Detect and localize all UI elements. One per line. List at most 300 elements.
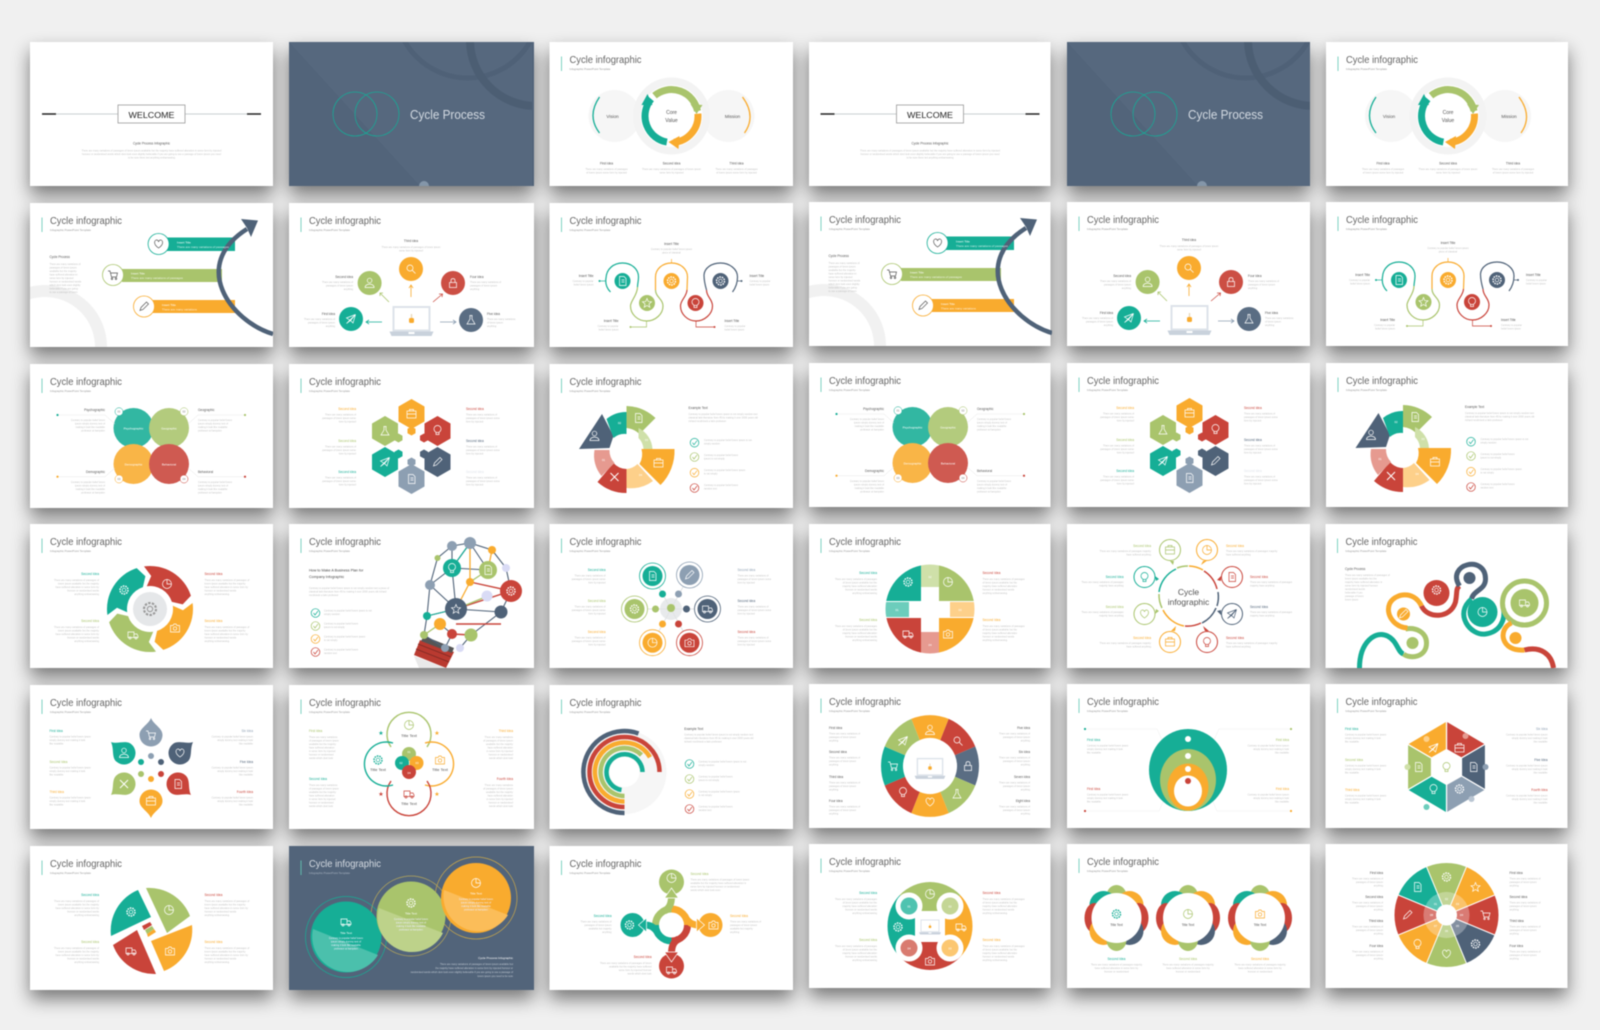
slide: hexagon cycle copy: form by injected xyxy=(1117,420,1135,422)
slide: four arrow ring xyxy=(30,524,273,668)
slide: laptop ideas: Second idea xyxy=(335,275,353,279)
slide: hexagon sectors: First Idea xyxy=(1345,727,1359,731)
slide: winding path: Contrary to popular xyxy=(598,325,619,328)
slide: four arrow ring: Second Idea xyxy=(204,572,223,576)
slide: four overlapping circles: Psychographic xyxy=(124,426,144,430)
slide: winding path: belief lorem ipsum xyxy=(599,328,618,332)
slide: six ringed nodes: form by injected xyxy=(738,612,755,616)
slide: callout ring: There are many variations of passages majority xyxy=(1226,550,1278,553)
slide: callout ring: majority have anything xyxy=(1250,584,1275,588)
slide: four arrow ring: Second Idea xyxy=(81,619,99,623)
slide: cross wheel: Cycle infographic xyxy=(829,537,901,548)
slide: arrow bars: passages of lorem ipsum xyxy=(50,266,77,270)
slide: segmented wheel with checklist: classical latin literature from 45 bc making it over 2000 years old xyxy=(688,416,758,420)
slide: callout ring: Second Idea xyxy=(1226,636,1244,640)
slide: segmented wheel with checklist: is not simply xyxy=(704,472,718,476)
slide: four overlapping circles copy: Psychographic xyxy=(863,407,884,411)
slide: four lobe clover: words which dont look xyxy=(489,757,514,760)
slide: eight segment wheel: 06 xyxy=(1445,929,1448,933)
slide: callout ring: Cycle xyxy=(1178,587,1199,597)
slide: pinwheel pie: Cycle infographic xyxy=(50,859,122,870)
slide: eight segment wheel: 05 xyxy=(1456,924,1459,928)
slide: four arrows cross: some form by injected humour or randomised xyxy=(690,886,740,888)
slide: arrow bars copy: Insert Title xyxy=(941,302,955,306)
slide: four quadrant disc with laptop: There are many variations of passages xyxy=(835,898,878,901)
slide: segmented wheel with checklist: Example Text xyxy=(688,406,708,410)
slide: cross wheel: There are many variations of passages xyxy=(982,625,1025,628)
slide: eight segment ring with laptop: anything xyxy=(829,812,839,816)
slide: four arrow ring: anything embarrassing xyxy=(204,593,230,596)
slide: three petal rings xyxy=(1067,844,1310,988)
slide: winding path copy: Contrary to popular xyxy=(1349,279,1370,282)
slide: four quadrant disc with laptop: There are many variations of passages xyxy=(982,945,1025,948)
slide: cross wheel: Second Idea xyxy=(859,618,877,622)
slide: rainbow arcs with checklist: ipsum is not simply xyxy=(698,779,720,782)
slide: welcome copy: Cycle Process Infographic xyxy=(911,142,949,146)
slide: hexagon cycle: Second idea xyxy=(338,439,356,443)
slide: pinwheel pie: humour or randomised words xyxy=(67,910,100,914)
slide: segmented wheel with checklist copy: richard mcclintock a latin professor xyxy=(1465,419,1503,422)
slide: four overlapping circles: making it look like readable xyxy=(76,488,106,491)
slide: welcome: to be sure there isnt anything embarrassing xyxy=(128,156,176,160)
slide: eight segment ring with laptop: passages of lorem ipsum xyxy=(1003,736,1030,739)
slide: four lobe clover: There are many variations xyxy=(309,784,338,787)
slide: three circles on navy: lorem ipsum you need to be sure xyxy=(478,975,514,978)
slide: three circles on navy: making it look like readable xyxy=(331,944,361,947)
slide: four overlapping circles copy: 04 xyxy=(962,476,965,480)
slide: rainbow arcs with checklist: Cycle infographic xyxy=(570,698,642,709)
slide: arrow bars: There are many variations xyxy=(162,308,197,312)
slide: cross wheel: Second Idea xyxy=(982,618,1001,622)
slide: six ringed nodes: passages of lorem ipsum some xyxy=(572,640,606,643)
slide: hexagon sectors: Cycle infographic xyxy=(1346,697,1418,708)
slide: three circles on navy: professor at hampden xyxy=(464,908,488,912)
slide: nested circles: Contrary to popular belief lorem ipsum xyxy=(1087,744,1128,748)
slide: four quadrant disc with laptop: majority have suffered alteration xyxy=(842,905,878,908)
slide: teardrop flower: simply dummy text making it look xyxy=(217,770,254,773)
slide: four lobe clover: have suffered alteration xyxy=(488,746,514,750)
slide: core value cycle: some form by injected xyxy=(660,172,684,174)
slide: hexagon sectors: simply dummy text making it look xyxy=(1345,768,1382,771)
slide: three circles on navy: professor at hampden xyxy=(334,948,358,950)
slide: teardrop flower: Cycle infographic xyxy=(50,698,122,709)
slide: nested circles: First Idea xyxy=(1087,738,1101,742)
slide: core value cycle copy: Second idea xyxy=(1439,162,1457,166)
slide: six ringed nodes: passages of lorem ipsum some xyxy=(572,578,606,581)
slide: pinwheel pie: anything embarrassing xyxy=(204,914,230,917)
slide: winding path: belief lorem ipsum xyxy=(574,284,594,286)
slide: segmented wheel with checklist: ipsum is not simply xyxy=(704,458,725,460)
slide: three circles on navy: the majority have suffered alteration in some form by injected humour or xyxy=(435,967,513,970)
slide: four arrow ring: There are many variations of passages of xyxy=(204,626,250,629)
slide: pinwheel pie: There are many variations of passages of xyxy=(204,900,250,903)
slide: eight segment ring with laptop: Eight idea xyxy=(1016,799,1030,803)
slide: eight segment wheel: anything xyxy=(1374,884,1384,888)
slide: arrow bars: to use a passage of lorem xyxy=(50,291,78,294)
slide: segmented wheel with checklist: Cycle infographic xyxy=(570,377,642,388)
slide: hexagon sectors: simply dummy text making it look xyxy=(1512,737,1548,740)
slide: six ringed nodes: There are many variations of xyxy=(738,636,769,640)
slide: four overlapping circles copy: ipsum simply dummy text of xyxy=(977,422,1007,424)
slide: core value cycle: of lorem ipsum some form by injected xyxy=(716,172,757,174)
slide: arrow bars: Insert Title xyxy=(162,303,176,307)
slide: hexagon sectors: Contrary to popular belief lorem ipsum xyxy=(1506,764,1548,768)
slide: winding path: belief lorem ipsum xyxy=(724,328,744,332)
slide: laptop ideas: passages of lorem ipsum xyxy=(470,284,497,288)
slide: four arrow ring: anything embarrassing xyxy=(74,593,100,596)
slide: winding path copy: belief lorem ipsum xyxy=(1501,328,1521,330)
slide: teardrop flower: Contrary to popular belief lorem ipsum xyxy=(212,766,253,770)
slide: nested circles: Infographic PowerPoint Template xyxy=(1087,709,1128,713)
slide: cross wheel: humour or randomised words xyxy=(982,588,1015,592)
slide: laptop ideas: Third idea xyxy=(404,239,418,243)
slide: segmented wheel with checklist copy: 01 xyxy=(1378,457,1382,461)
slide: four arrows cross: anything xyxy=(730,931,740,934)
slide: segmented wheel with checklist copy: simply random xyxy=(1480,442,1496,444)
slide: eight segment wheel: anything xyxy=(1510,932,1519,936)
slide: eight segment ring with laptop: Four idea xyxy=(829,799,843,803)
slide: three petal rings: Infographic PowerPoint Template xyxy=(1087,869,1128,873)
slide: three petal rings: have suffered alteration in some form by xyxy=(1166,967,1211,970)
slide: hexagon cycle copy: There are many variations of xyxy=(1103,476,1134,478)
slide: rainbow arcs with checklist: Contrary to popular belief lorem ipsum is not simply random text xyxy=(684,734,753,736)
slide: rainbow arcs with checklist: Infographic PowerPoint Template xyxy=(570,710,611,714)
slide: segmented wheel with checklist: simply random xyxy=(704,442,720,446)
slide: eight segment ring with laptop: There are many variations of xyxy=(829,782,860,784)
slide: teardrop flower: simply dummy text making it look xyxy=(50,739,86,742)
slide: eight segment wheel: anything xyxy=(1374,932,1384,936)
slide: arrow bars: have suffered alteration in xyxy=(50,274,78,276)
slide: four lobe clover: have suffered alteration xyxy=(309,794,335,798)
slide: hexagon sectors: Five Idea xyxy=(1534,758,1548,762)
slide: three circles on navy: professor at hampden xyxy=(399,928,423,932)
slide: pinwheel pie: There are many variations of passages of xyxy=(54,947,99,950)
slide: lightbulb network: Company Infographic xyxy=(309,575,344,579)
slide: welcome copy: WELCOME xyxy=(907,110,953,120)
slide: four lobe clover: available but the majority xyxy=(309,791,337,794)
slide: eight segment wheel: Second idea xyxy=(1365,895,1383,899)
slide: four quadrant disc with laptop: majority have suffered alteration xyxy=(982,952,1018,955)
slide: hexagon cycle: Second idea xyxy=(338,407,356,411)
slide: six ringed nodes: form by injected xyxy=(588,644,606,646)
slide: hexagon cycle copy: form by injected xyxy=(1244,482,1262,486)
slide: core value cycle: Value xyxy=(665,118,678,124)
slide: three petal rings: Cycle infographic xyxy=(1087,857,1159,868)
slide: hexagon sectors: like readable xyxy=(1534,740,1548,744)
slide: four arrow ring: There are many variations of passages of xyxy=(204,579,250,582)
slide: eight segment wheel: 01 xyxy=(1434,902,1437,906)
slide: rainbow arcs with checklist: simply random xyxy=(698,764,714,767)
slide: eight segment ring with laptop: Cycle infographic xyxy=(829,697,901,708)
slide: cycle process cover copy xyxy=(1067,0,1380,191)
slide: hexagon cycle: There are many variations of xyxy=(325,414,356,416)
slide: three petal rings: have suffered alteration in some form by xyxy=(1095,967,1139,970)
slide: laptop ideas: Cycle infographic xyxy=(309,216,381,227)
slide: cycle process cover copy: Cycle Process xyxy=(1188,108,1263,122)
slide: teardrop flower: Fourth Idea xyxy=(237,790,253,794)
slide: four arrow ring: Cycle infographic xyxy=(50,537,122,548)
slide: hexagon cycle: passages of lorem ipsum some xyxy=(466,417,500,420)
slide: segmented wheel with checklist: 03 xyxy=(645,438,648,442)
slide: pinwheel pie: There are many variations of passages of xyxy=(54,900,99,903)
slide: arrow bars: Cycle infographic xyxy=(50,216,122,227)
slide: eight segment wheel: anything xyxy=(1510,908,1519,912)
slide: winding path: Insert Title xyxy=(604,319,619,323)
slide: core value cycle: There are many variations of passages xyxy=(585,168,628,171)
slide: laptop ideas: There are many variations of passages of lorem ipsum xyxy=(382,246,440,249)
slide: four overlapping circles: professor at hampden xyxy=(198,492,222,494)
slide: teardrop flower: Contrary to popular belief lorem ipsum xyxy=(212,736,253,738)
slide: laptop ideas: anything xyxy=(326,325,336,328)
slide: four quadrant disc with laptop: Second Idea xyxy=(982,891,1001,895)
slide: cross wheel: majority have suffered alteration xyxy=(982,632,1018,635)
slide: eight segment wheel: There are many variations of xyxy=(1510,950,1541,954)
slide: eight segment wheel: anything xyxy=(1374,908,1384,912)
slide: rainbow arcs with checklist: richard mcclintock a latin professor xyxy=(684,740,722,744)
slide: segmented wheel with checklist: Contrary to popular belief lorem xyxy=(704,454,738,457)
slide: arrow bars: some form by injected xyxy=(50,277,74,280)
slide: hexagon sectors: like readable xyxy=(1534,802,1548,804)
slide: four lobe clover: in some form by injected xyxy=(487,798,514,801)
slide: cross wheel: humour or randomised words xyxy=(845,588,878,592)
slide: three petal rings: Second Idea xyxy=(1108,957,1126,961)
slide: six ringed nodes: Second idea xyxy=(738,568,755,572)
slide: segmented wheel with checklist copy: 04 xyxy=(1415,472,1419,476)
slide: hexagon sectors: like readable xyxy=(1345,740,1359,744)
slide: four arrow ring: have suffered alteration in some form by xyxy=(56,633,100,636)
slide: eight segment ring with laptop: Infographic PowerPoint Template xyxy=(829,709,870,713)
slide: four lobe clover: ★ xyxy=(434,791,440,798)
slide: three circles on navy xyxy=(289,846,534,990)
slide: four lobe clover: of passages of lorem ipsum xyxy=(309,788,339,790)
slide: nested circles: First Idea xyxy=(1276,787,1289,791)
slide: three petal rings: There are many variations of passages majority xyxy=(1234,964,1286,966)
slide: four quadrant disc with laptop: Second Idea xyxy=(859,938,877,942)
slide: four quadrant disc with laptop: Second Idea xyxy=(859,891,877,895)
slide: welcome: Cycle Process Infographic xyxy=(133,142,170,146)
slide: eight segment wheel: passages of lorem ipsum xyxy=(1510,881,1537,884)
slide: three circles on navy: Title Text xyxy=(340,931,352,935)
slide: three circles on navy: ipsum simply dummy text of xyxy=(461,902,491,904)
slide: four quadrant disc with laptop: 04 xyxy=(907,946,911,950)
slide: winding path copy: Insert Title xyxy=(1526,273,1541,277)
slide: four lobe clover: 04 xyxy=(407,771,411,775)
slide: three circles on navy: Infographic PowerPoint Template xyxy=(309,871,350,875)
slide: eight segment wheel: passages of lorem ipsum xyxy=(1356,905,1383,908)
slide: core value cycle: There are many variations of passages xyxy=(715,168,758,171)
slide: laptop ideas: passages of lorem ipsum xyxy=(326,284,353,288)
slide: swirling path: Cycle infographic xyxy=(1346,537,1418,548)
slide: six ringed nodes: There are many variations of xyxy=(574,574,606,578)
slide: segmented wheel with checklist copy: classical latin literature from 45 bc making it over 2000 years old xyxy=(1465,416,1535,418)
slide: nested circles: simply dummy text making it look xyxy=(1253,748,1290,751)
slide: segmented wheel with checklist copy: Cycle infographic xyxy=(1346,376,1418,387)
slide: four overlapping circles: Contrary to popular belief lorem xyxy=(71,481,105,484)
slide: lightbulb network: classical latin literature from 45 bc making it over 2000 years old richard xyxy=(309,590,387,594)
slide: laptop ideas: There are many variations of xyxy=(470,281,501,284)
slide: arrow bars: There are many variations of xyxy=(50,263,81,266)
slide: swirling path: Cycle Process xyxy=(1345,567,1366,571)
slide: hexagon cycle copy: form by injected xyxy=(1117,482,1135,486)
slide: pinwheel pie xyxy=(30,846,273,990)
slide: four overlapping circles: professor at hampden xyxy=(198,430,222,432)
slide: swirling path: some form by injected humour xyxy=(1345,584,1378,588)
slide: six ringed nodes: passages of lorem ipsum some xyxy=(738,640,772,643)
slide: segmented wheel with checklist: random text xyxy=(704,488,717,490)
slide: cross wheel: There are many variations of passages xyxy=(835,578,878,581)
slide: laptop ideas copy: Third idea xyxy=(1182,238,1196,242)
slide: hexagon cycle: form by injected xyxy=(339,484,357,486)
slide: four overlapping circles: 04 xyxy=(183,477,186,481)
slide: hexagon cycle: passages of lorem ipsum some xyxy=(466,480,500,483)
slide: six ringed nodes: Cycle infographic xyxy=(570,537,642,548)
slide: arrow bars copy: Cycle Process xyxy=(828,254,849,258)
slide: pinwheel pie: humour or randomised words xyxy=(204,958,237,960)
slide: teardrop flower: simply dummy text making it look xyxy=(217,739,254,742)
slide: callout ring: majority have anything xyxy=(1099,614,1124,618)
slide: hexagon cycle copy: passages of lorem ipsum some xyxy=(1244,479,1278,482)
slide: four overlapping circles: Behavioral xyxy=(198,470,213,474)
slide: core value cycle xyxy=(550,42,793,186)
slide: laptop ideas copy: passages of lorem ipsum xyxy=(1104,284,1131,286)
slide: teardrop flower: simply dummy text making it look xyxy=(50,800,86,803)
slide: four overlapping circles copy: 01 xyxy=(897,409,900,413)
slide: cross wheel: 04 xyxy=(928,643,932,647)
slide: lightbulb network: Contrary to popular belief lorem xyxy=(324,648,358,652)
slide: core value cycle: There are many variations of passages of lorem ipsum xyxy=(642,168,701,171)
slide: hexagon cycle: There are many variations of xyxy=(466,446,497,448)
slide: teardrop flower: simply dummy text making it look xyxy=(50,770,86,773)
slide: four overlapping circles: 01 xyxy=(118,410,121,414)
slide: four overlapping circles copy: Contrary to popular belief lorem xyxy=(850,418,884,421)
slide: pinwheel pie: lorem ipsum available but the majority xyxy=(204,950,246,954)
slide: cross wheel: anything embarrassing xyxy=(982,592,1008,595)
slide: hexagon cycle: form by injected xyxy=(466,452,484,456)
slide: four arrows cross: some form by injected humour xyxy=(619,969,652,972)
slide: winding path copy: Insert Title xyxy=(1355,273,1370,277)
slide: hexagon cycle: Second idea xyxy=(338,470,356,474)
slide: arrow bars copy: There are many variations of passages xyxy=(956,244,1008,248)
slide: pinwheel pie: anything embarrassing xyxy=(204,961,230,964)
slide: eight segment ring with laptop: anything xyxy=(1021,764,1031,766)
slide: winding path xyxy=(550,203,793,347)
slide: three petal rings: humour or randomised xyxy=(1104,970,1129,974)
slide: winding path: Insert Title xyxy=(664,242,679,246)
slide: nested circles: Contrary to popular belief lorem ipsum xyxy=(1248,794,1289,796)
slide: eight segment wheel: Four idea xyxy=(1370,944,1383,948)
slide: hexagon sectors: Contrary to popular belief lorem ipsum xyxy=(1345,764,1386,768)
slide: four arrow ring: humour or randomised words xyxy=(67,636,100,640)
slide: eight segment wheel: Third idea xyxy=(1510,919,1524,923)
slide: nested circles: like readable xyxy=(1275,800,1290,804)
slide: hexagon sectors: Infographic PowerPoint Template xyxy=(1346,709,1387,713)
slide: four overlapping circles copy: Geographic xyxy=(977,407,994,411)
slide: eight segment ring with laptop: First idea xyxy=(829,726,842,730)
slide: rainbow arcs with checklist: Example Text xyxy=(684,727,703,731)
slide: four quadrant disc with laptop xyxy=(809,844,1050,988)
slide: four overlapping circles: Cycle infographic xyxy=(50,377,122,388)
slide: arrow bars: Insert Title xyxy=(177,240,191,244)
slide: core value cycle copy: Mission xyxy=(1501,114,1517,119)
slide: four lobe clover: in some form by injected xyxy=(487,750,514,753)
slide: callout ring: There are many variations of passages majority xyxy=(1100,550,1152,553)
slide: callout ring xyxy=(1067,524,1310,668)
slide: laptop ideas copy: anything xyxy=(1248,287,1258,290)
slide: core value cycle copy: Value xyxy=(1442,118,1454,124)
slide: welcome: There are many variations of passages of lorem ipsum available but the majority have suffered alteration in some form by injected xyxy=(82,150,222,152)
slide: eight segment ring with laptop: passages of lorem ipsum xyxy=(829,736,856,739)
slide: winding path: Contrary to popular xyxy=(573,280,594,283)
slide: segmented wheel with checklist copy: Infographic PowerPoint Template xyxy=(1346,388,1387,392)
slide: hexagon cycle: passages of lorem ipsum some xyxy=(322,417,357,420)
slide: laptop ideas: Four idea xyxy=(470,275,484,279)
slide: four overlapping circles: professor at hampden xyxy=(81,430,106,432)
slide: hexagon cycle xyxy=(289,364,534,508)
slide: lightbulb network: ipsum is not simply xyxy=(324,626,345,629)
slide: cross wheel: majority have suffered alteration xyxy=(842,585,878,588)
slide: three petal rings: humour or randomised xyxy=(1176,970,1201,974)
slide: cross wheel xyxy=(809,524,1050,668)
slide: segmented wheel with checklist copy: Contrary to popular belief lorem xyxy=(1480,453,1515,456)
slide: winding path copy: piece of classical xyxy=(1439,250,1458,254)
slide: eight segment ring with laptop: There are many variations of xyxy=(829,756,860,760)
slide: three petal rings: humour or randomised xyxy=(1248,970,1273,974)
slide: four arrows cross: passages of lorem ipsum xyxy=(730,924,757,927)
slide: six ringed nodes: There are many variations of xyxy=(738,574,769,578)
slide: segmented wheel with checklist: Contrary to popular belief lorem ipsum xyxy=(704,469,745,472)
slide: four lobe clover: available but the majority xyxy=(486,743,514,746)
slide: four arrow ring: lorem ipsum available but the majority xyxy=(204,582,246,586)
slide: eight segment ring with laptop: anything xyxy=(829,740,839,742)
slide: four arrows cross: Second Idea xyxy=(594,914,612,918)
slide: rainbow arcs with checklist: random text xyxy=(698,809,712,812)
slide: hexagon sectors: simply dummy text making it look xyxy=(1345,798,1382,801)
slide: winding path: Contrary to popular belief lorem ipsum xyxy=(651,248,692,251)
slide: four overlapping circles: Geographic xyxy=(161,426,177,430)
slide: segmented wheel with checklist: richard mcclintock a latin professor xyxy=(688,420,726,423)
slide: four lobe clover: of passages of lorem ipsum xyxy=(309,740,339,742)
slide: laptop ideas: Infographic PowerPoint Template xyxy=(309,228,350,232)
slide: three circles on navy: Title Text xyxy=(470,892,482,896)
slide: laptop ideas copy: There are many variations of xyxy=(1082,317,1113,320)
slide: winding path copy: Cycle infographic xyxy=(1346,215,1418,226)
slide: eight segment wheel: There are many variations of xyxy=(1352,950,1383,954)
slide: three petal rings: Second Idea xyxy=(1251,957,1269,961)
slide: nested circles: Contrary to popular belief lorem ipsum xyxy=(1087,794,1128,796)
slide: three petal rings: Title Text xyxy=(1110,923,1123,927)
slide: four overlapping circles: ipsum simply dummy text of xyxy=(75,422,105,426)
slide: eight segment ring with laptop: Second idea xyxy=(829,750,847,754)
slide: swirling path: believable if you xyxy=(1345,592,1363,594)
slide: eight segment ring with laptop: There are many variations of xyxy=(829,806,860,808)
slide: teardrop flower: like readable xyxy=(239,774,254,776)
slide: four arrows cross: There are many variations of xyxy=(730,920,761,924)
slide: four quadrant disc with laptop: 03 xyxy=(948,946,952,950)
slide: nested circles: like readable xyxy=(1087,752,1101,754)
slide: core value cycle: of lorem ipsum some form by injected xyxy=(586,172,627,174)
slide: hexagon cycle copy: passages of lorem ipsum some xyxy=(1244,416,1278,419)
slide: four overlapping circles copy: Behavioral xyxy=(977,469,992,473)
slide: cross wheel: of lorem ipsum available but the xyxy=(982,582,1018,584)
slide: three circles on navy: There are many variations of passages of lorem ipsum available but xyxy=(440,963,513,966)
slide: eight segment wheel: 03 xyxy=(1456,902,1459,906)
slide: arrow bars: Infographic PowerPoint Template xyxy=(50,228,91,232)
slide: cross wheel: 01 xyxy=(895,608,899,612)
slide: eight segment wheel: 07 xyxy=(1434,924,1437,928)
slide: four lobe clover: ★ xyxy=(378,791,384,798)
slide: laptop ideas: anything xyxy=(487,325,497,328)
slide: cross wheel: anything embarrassing xyxy=(852,639,878,642)
